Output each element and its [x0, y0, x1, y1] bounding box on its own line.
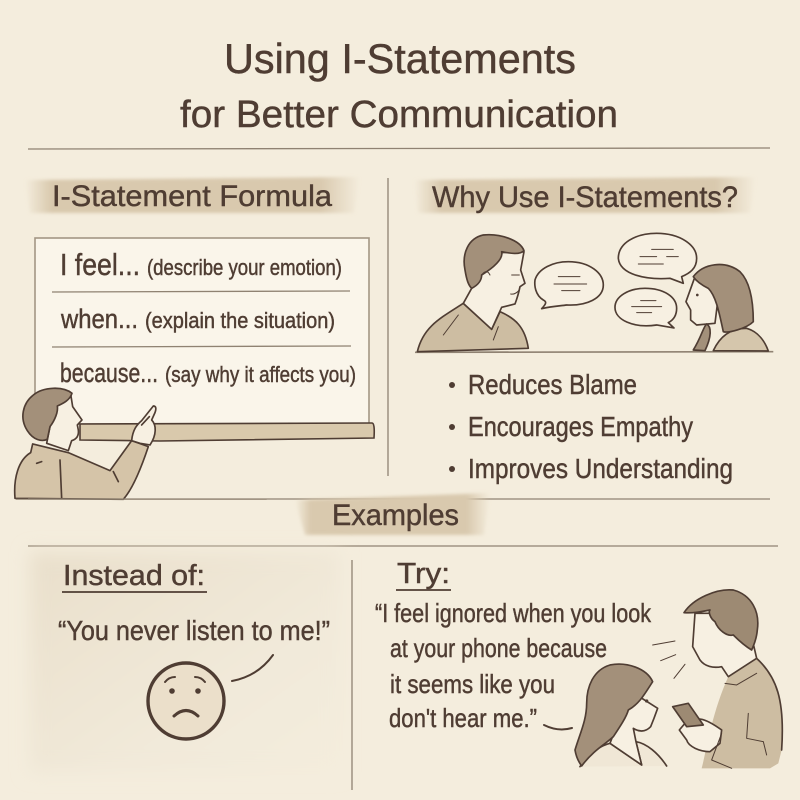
formula line: I feel: (describe your emotion)	[147, 255, 342, 280]
quote: I-statement example: it seems like you	[390, 669, 555, 699]
quote: I-statement example: at your phone because	[390, 633, 607, 663]
formula line: when: when...	[60, 304, 138, 334]
list: benefits of I-statements: Encourages Empathy	[468, 411, 693, 442]
list: benefits of I-statements	[449, 369, 733, 484]
heading: I-Statement Formula: I-Statement Formula	[52, 180, 332, 213]
formula line: when: (explain the situation)	[145, 308, 335, 333]
icon: teacher pointing at board	[15, 388, 267, 499]
illustration: man and woman talking	[415, 233, 773, 352]
quote: blaming statement: “You never listen to me!”	[58, 615, 330, 646]
title: for Better Communication	[180, 94, 618, 136]
formula line: because: (say why it affects you)	[165, 362, 356, 387]
man	[417, 235, 528, 352]
woman	[575, 664, 667, 767]
board surface	[35, 238, 369, 424]
panel: instead of	[30, 552, 340, 772]
icon: sad face	[148, 663, 224, 739]
formula line: when	[60, 304, 335, 334]
formula line: because: because...	[60, 358, 158, 388]
quote: I-statement example: “I feel ignored when you look	[375, 598, 652, 628]
formula line: I feel	[60, 247, 342, 282]
panel: try	[375, 558, 782, 768]
subheading: Try: Try:	[397, 558, 450, 590]
subheading: Instead of: Instead of:	[63, 560, 205, 592]
woman	[686, 265, 768, 351]
speech bubble left	[535, 262, 603, 309]
heading: Examples: Examples	[332, 499, 459, 532]
quote: I-statement example: don't hear me.”	[389, 703, 537, 733]
man	[653, 590, 782, 768]
panel: formula whiteboard	[35, 238, 374, 441]
title: Using I-Statements	[224, 35, 576, 82]
speech bubble top right	[618, 233, 697, 283]
list: benefits of I-statements: Reduces Blame	[468, 369, 637, 400]
heading: Why Use I-Statements?: Why Use I-Statements?	[432, 181, 738, 214]
title	[180, 35, 618, 136]
speech bubble lower right	[615, 288, 677, 328]
formula line: I feel: I feel...	[60, 247, 140, 282]
speech tail	[232, 655, 273, 681]
list: benefits of I-statements: Improves Understanding	[468, 453, 733, 484]
heading: Examples	[295, 493, 490, 535]
board tray	[80, 423, 374, 441]
illustration: woman and man with phone	[575, 590, 782, 768]
quote: I-statement example	[375, 598, 652, 733]
formula line: because	[60, 358, 356, 388]
